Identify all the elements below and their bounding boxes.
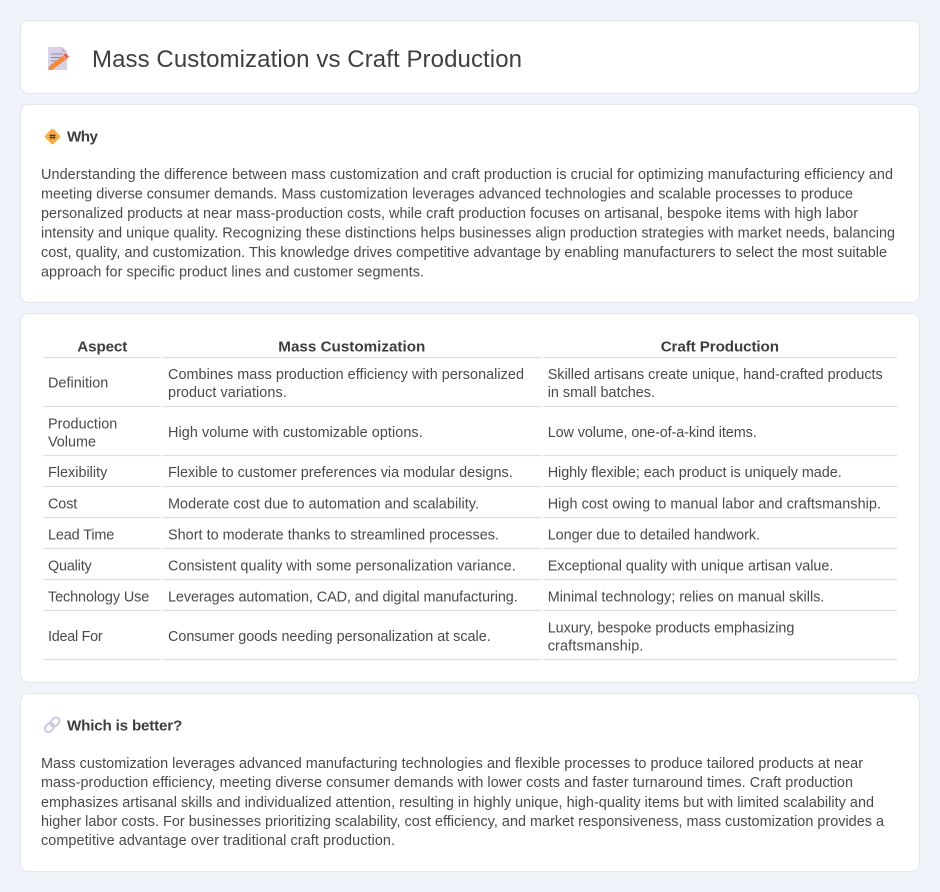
table row: lead time: Longer due to detailed handwork. (548, 527, 760, 543)
icon: chain link (43, 716, 61, 734)
table row: technology use: Minimal technology; relies on manual skills. (548, 589, 824, 605)
table row: definition: Combines mass production efficiency with personalized (168, 367, 524, 383)
table header row: Mass Customization (278, 339, 425, 356)
table header row: Aspect (77, 339, 127, 356)
table row: production volume: Low volume, one-of-a-kind items. (548, 425, 757, 441)
table row: definition: Skilled artisans create unique, hand-crafted products (548, 367, 883, 383)
table row: production volume (48, 416, 757, 450)
table row: cost: Cost (48, 496, 77, 512)
icon: orange diamond sign (44, 128, 61, 145)
text block: which is better paragraph: Mass customization leverages advanced manufacturing technologies and flexible processes to produce tailored products at near (41, 756, 863, 772)
table row: cost (48, 496, 881, 512)
table row: lead time: Lead Time (48, 527, 114, 543)
table header row: Craft Production (661, 339, 779, 356)
panel: why (20, 104, 920, 302)
text block: which is better paragraph: emphasizes artisanal skills and individualized attention, resulting in highly unique, high-quality items but with limited scalability and (41, 795, 874, 811)
table row: cost: High cost owing to manual labor and craftsmanship. (548, 496, 881, 512)
text block: why paragraph: Understanding the difference between mass customization and craft production is crucial for optimizing manufacturing efficiency and (41, 167, 893, 183)
table row: ideal for: Ideal For (48, 629, 103, 645)
table row: ideal for: Luxury, bespoke products emphasizing (548, 620, 794, 636)
table row: definition: Definition (48, 376, 108, 392)
table row: quality: Exceptional quality with unique artisan value. (548, 558, 833, 574)
table row: technology use (48, 589, 824, 605)
table row: production volume: Volume (48, 434, 96, 450)
panel: comparison table (20, 314, 920, 682)
title: Mass Customization vs Craft Production (92, 46, 522, 73)
icon: document with pencil (48, 47, 69, 70)
text block: which is better paragraph: higher labor costs. For businesses prioritizing scalability, cost efficiency, and market responsiveness, mass customization provides a (41, 814, 884, 830)
table row: flexibility: Highly flexible; each product is uniquely made. (548, 465, 842, 481)
table row: lead time (48, 527, 760, 543)
table row: production volume: Production (48, 416, 117, 432)
text block: why paragraph: meeting diverse consumer demands. Mass customization leverages advanced technologies and scalable processes to produce (41, 186, 853, 202)
table row: definition (48, 367, 883, 401)
text block: which is better paragraph: competitive advantage over traditional craft production. (41, 833, 395, 849)
panel: which is better (20, 694, 920, 872)
table row: definition: product variations. (168, 385, 287, 401)
table header row (77, 339, 779, 356)
table row: technology use: Leverages automation, CAD, and digital manufacturing. (168, 589, 518, 605)
table row: cost: Moderate cost due to automation and scalability. (168, 496, 479, 512)
text block: why paragraph: approach for specific product lines and customer segments. (41, 264, 424, 280)
heading: why: Why (67, 128, 99, 146)
text block: why paragraph: intensity and unique quality. Recognizing these distinctions helps businesses align production strategies with market needs, balancing (41, 226, 895, 242)
text block: which is better paragraph (41, 756, 884, 849)
table row: flexibility (48, 465, 842, 481)
table row: quality (48, 558, 833, 574)
text block: why paragraph (41, 167, 895, 280)
table row: quality: Quality (48, 558, 92, 574)
table row: ideal for: Consumer goods needing personalization at scale. (168, 629, 491, 645)
table row: quality: Consistent quality with some personalization variance. (168, 558, 516, 574)
table row: flexibility: Flexibility (48, 465, 108, 481)
table row: production volume: High volume with customizable options. (168, 425, 423, 441)
table row: ideal for: craftsmanship. (548, 638, 643, 654)
table row: technology use: Technology Use (48, 589, 149, 605)
panel: title card (20, 20, 920, 94)
text block: why paragraph: cost, quality, and customization. This knowledge drives competitive advantage by enabling manufacturers to select the most suitable (41, 245, 887, 261)
table row: definition: in small batches. (548, 385, 655, 401)
text block: why paragraph: personalized products at near mass-production costs, while craft production focuses on artisanal, bespoke items with high labor (41, 206, 858, 222)
heading: which is better: Which is better? (67, 718, 182, 735)
table row: flexibility: Flexible to customer preferences via modular designs. (168, 465, 513, 481)
table row: ideal for (48, 620, 794, 654)
text block: which is better paragraph: mass-production efficiency, meeting diverse consumer demands with lower costs and faster turnaround times. Craft production (41, 775, 853, 791)
table row: lead time: Short to moderate thanks to streamlined processes. (168, 527, 499, 543)
